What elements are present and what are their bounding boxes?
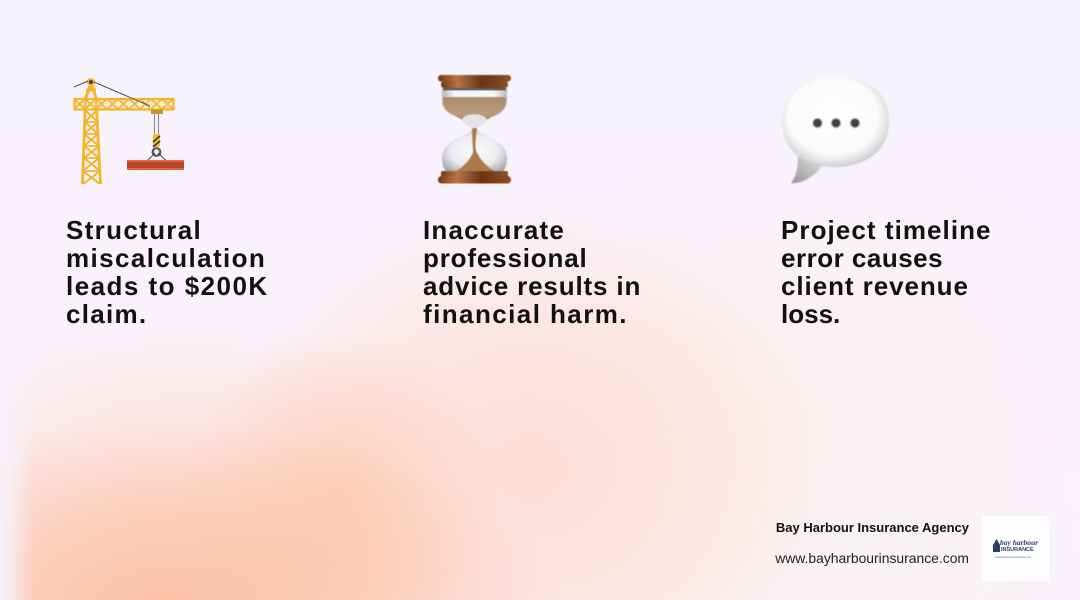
text block: structural miscalculation: claim.	[66, 299, 147, 329]
text block: timeline error: error causes	[781, 243, 943, 273]
logo wordmark: bay harbour	[1000, 538, 1038, 547]
text block: structural miscalculation: leads to $200K	[66, 271, 269, 301]
text block: timeline error	[781, 215, 992, 329]
logo wordmark	[993, 538, 1038, 559]
text block: timeline error: Project timeline	[781, 215, 992, 245]
text block: structural miscalculation: miscalculation	[66, 243, 266, 273]
text block: inaccurate advice	[423, 215, 641, 329]
agency name: Bay Harbour Insurance Agency	[776, 520, 969, 535]
text block: inaccurate advice: Inaccurate	[423, 215, 565, 245]
logo tile	[982, 516, 1049, 581]
icon: hourglass	[437, 74, 512, 184]
text block: inaccurate advice: advice results in	[423, 271, 641, 301]
text block: inaccurate advice: financial harm.	[423, 299, 628, 329]
text block: timeline error: loss.	[781, 299, 840, 329]
logo wordmark: www.bayharbourinsurance.com	[995, 555, 1031, 559]
agency website: www.bayharbourinsurance.com	[775, 550, 969, 566]
icon: speech bubble	[782, 79, 890, 184]
text block: inaccurate advice: professional	[423, 243, 588, 273]
icon: construction crane	[73, 78, 184, 185]
logo wordmark: INSURANCE	[1001, 547, 1034, 553]
text block: structural miscalculation: Structural	[66, 215, 202, 245]
text block: structural miscalculation	[66, 215, 269, 329]
text block: timeline error: client revenue	[781, 271, 969, 301]
